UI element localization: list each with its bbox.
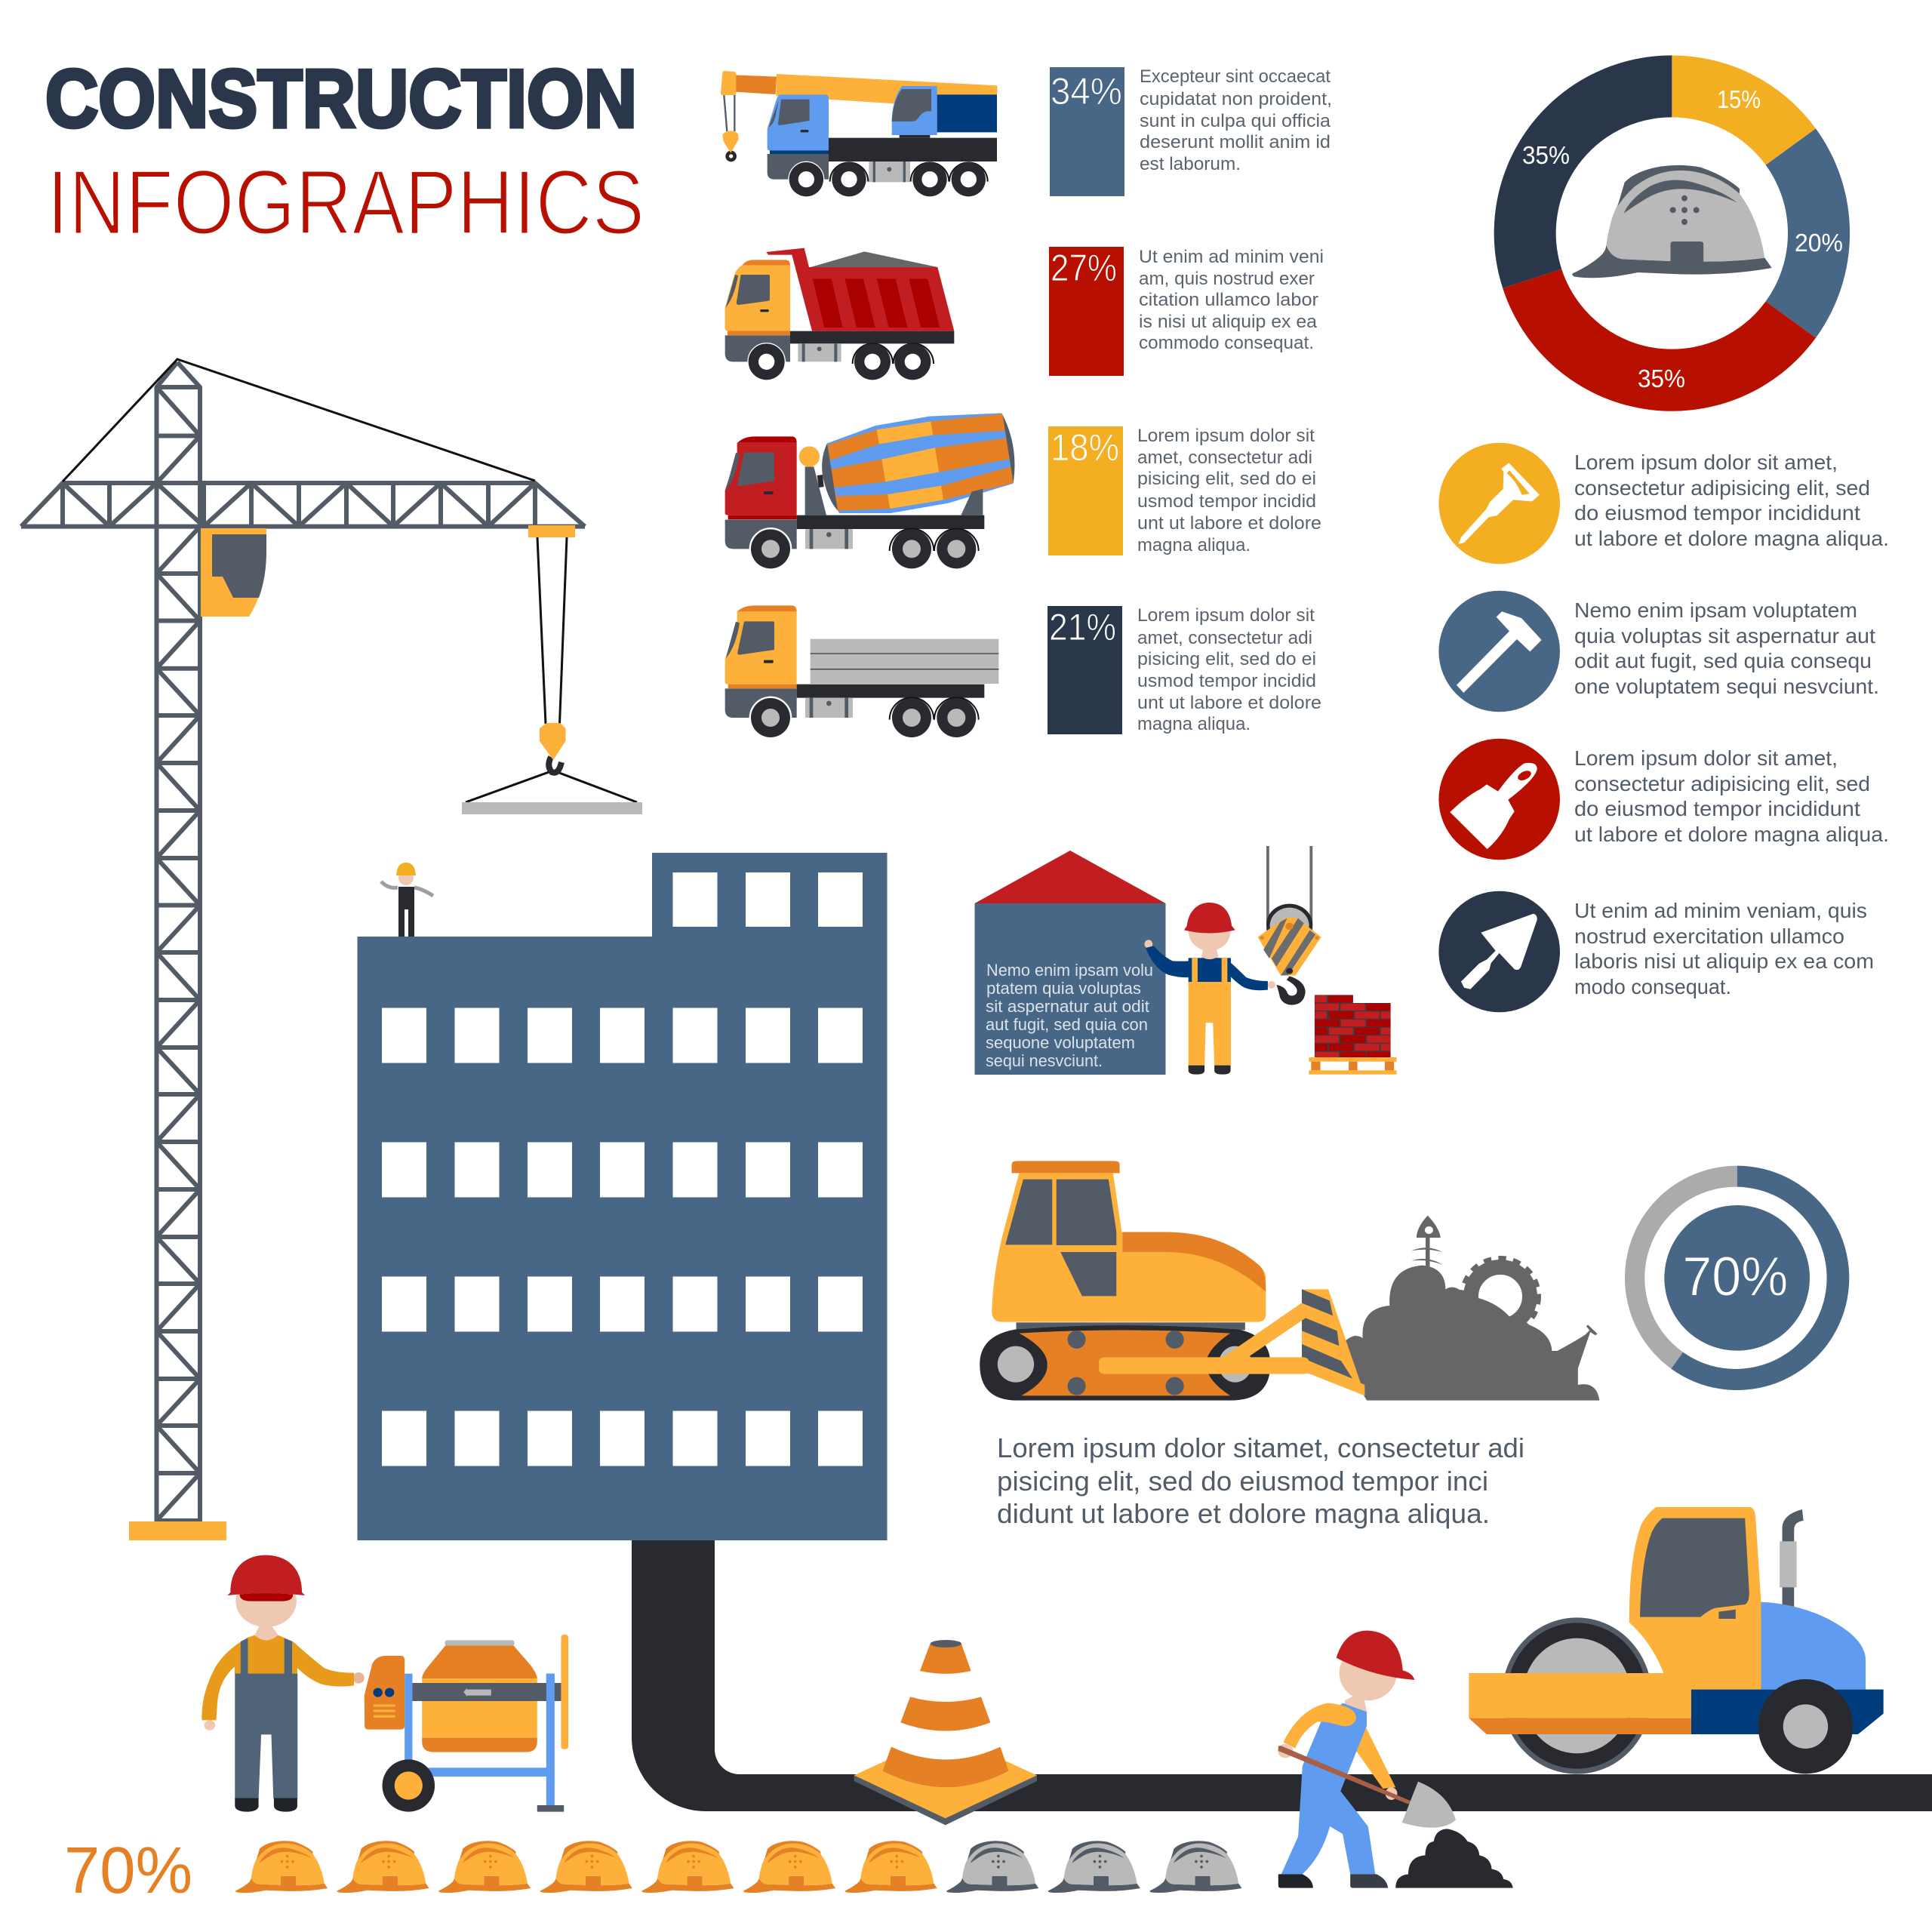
stat text: 27%: citation ullamco labor (1139, 290, 1318, 310)
ring chart 70%: 70% (1682, 1247, 1788, 1308)
cement mixer (365, 1635, 568, 1812)
bulldozer and debris (980, 1161, 1599, 1401)
bulldozer body (992, 1161, 1266, 1322)
stat text: 18% (1137, 426, 1321, 555)
exhaust pipe (1780, 1509, 1804, 1607)
house text: Nemo enim ipsam volu (986, 961, 1153, 980)
bulldozer caption (997, 1432, 1524, 1529)
house text panel (975, 851, 1165, 1075)
stat bar: 18% (1048, 426, 1123, 555)
suspended slab (462, 802, 642, 814)
stat text: 21%: unt ut labore et dolore (1137, 693, 1321, 713)
crane base (129, 1521, 226, 1540)
title line: infographics: INFOGRAPHICS (47, 151, 645, 254)
worker in yellow overalls (1145, 903, 1275, 1075)
icon: navy circle trowel (1438, 891, 1560, 1012)
helmet 7 (845, 1841, 937, 1893)
crane cabin (201, 528, 266, 617)
traffic cone (854, 1640, 1037, 1825)
crane trolley (528, 525, 575, 537)
text: hammer (1574, 598, 1879, 698)
stat text: 18%: usmod tempor incidid (1137, 491, 1316, 512)
title (45, 53, 645, 254)
dump truck (725, 248, 954, 380)
text: jackhammer: do eiusmod tempor incididunt (1574, 501, 1860, 525)
stat text: 21%: amet, consectetur adi (1137, 628, 1312, 648)
house text: aut fugit, sed quia con (986, 1015, 1148, 1034)
helmet 6 (743, 1841, 835, 1893)
stat text: 34%: est laborum. (1140, 154, 1241, 174)
bulldozer caption: Lorem ipsum dolor sitamet, consectetur adi (997, 1432, 1524, 1463)
helmet row (235, 1841, 1242, 1893)
donut chart with helmet (1494, 55, 1850, 411)
text: hammer: odit aut fugit, sed quia consequ (1574, 649, 1872, 672)
text: trowel: modo consequat. (1574, 975, 1731, 998)
icon: blue circle hammer (1438, 591, 1560, 712)
text: trowel: laboris nisi ut aliquip ex ea com (1574, 949, 1874, 973)
stat text: 18%: pisicing elit, sed do ei (1137, 469, 1316, 489)
helmet 3 (438, 1841, 531, 1893)
title line: construction: CONSTRUCTION (45, 53, 637, 145)
stat bar: 21% (1048, 606, 1122, 734)
helmet 10 (1149, 1841, 1242, 1893)
text: jackhammer: ut labore et dolore magna aliqua. (1574, 527, 1889, 550)
crane lattice (21, 362, 585, 1521)
text: jackhammer: consectetur adipisicing elit, sed (1574, 476, 1870, 500)
cement mixer truck (725, 413, 1014, 568)
text: scraper: consectetur adipisicing elit, sed (1574, 772, 1870, 795)
house text (986, 961, 1153, 1070)
donut labels: 15% (1717, 85, 1761, 113)
house text: sequi nesvciunt. (986, 1051, 1103, 1070)
helmet 4 (540, 1841, 632, 1893)
roller hood (1761, 1602, 1866, 1690)
text: jackhammer: Lorem ipsum dolor sit amet, (1574, 451, 1838, 474)
bulldozer caption: didunt ut labore et dolore magna aliqua. (997, 1498, 1490, 1529)
text: hammer: quia voluptas sit aspernatur aut (1574, 624, 1875, 648)
helmet stat 70%: 70% (64, 1834, 192, 1907)
house text: sit aspernatur aut odit (986, 997, 1149, 1016)
building windows (382, 872, 863, 1466)
crane hook (540, 723, 566, 773)
stat text: 27%: is nisi ut aliquip ex ea (1139, 312, 1318, 332)
stat text: 18%: magna aliqua. (1137, 535, 1251, 555)
stat bar: 18%: 18% (1051, 426, 1119, 469)
stat text: 18%: Lorem ipsum dolor sit (1137, 426, 1315, 446)
stat bar: 21%: 21% (1049, 606, 1116, 648)
text: hammer: Nemo enim ipsam voluptatem (1574, 598, 1857, 622)
worker in grey overalls (202, 1555, 365, 1812)
bulldozer blade (1300, 1289, 1364, 1395)
stat text: 27%: commodo consequat. (1139, 333, 1314, 353)
stat text: 34% (1140, 66, 1332, 174)
roller chassis (1691, 1690, 1884, 1734)
helmet 2 (337, 1841, 429, 1893)
house text: ptatem quia voluptas (986, 979, 1141, 998)
donut labels (1522, 85, 1843, 392)
icon: grey helmet (1572, 165, 1772, 278)
icon: yellow circle jackhammer (1438, 443, 1560, 564)
text: trowel (1574, 899, 1874, 998)
roller front wheel (1758, 1679, 1853, 1774)
stat text: 18%: amet, consectetur adi (1137, 448, 1312, 468)
stat text: 21%: Lorem ipsum dolor sit (1137, 605, 1315, 626)
donut segments (1494, 55, 1850, 411)
helmet 9 (1048, 1841, 1140, 1893)
tower crane (21, 359, 642, 1540)
text: scraper: Lorem ipsum dolor sit amet, (1574, 746, 1838, 770)
gear silhouette (1463, 1260, 1537, 1334)
crane cables (63, 359, 637, 802)
house text: sequone voluptatem (986, 1033, 1135, 1052)
text: trowel: nostrud exercitation ullamco (1574, 924, 1844, 948)
digging worker (1278, 1631, 1456, 1888)
road roller (1469, 1507, 1884, 1774)
bulldozer tracks (980, 1322, 1270, 1401)
ring chart 70% (1625, 1166, 1849, 1390)
text: trowel: Ut enim ad minim veniam, quis (1574, 899, 1867, 922)
stat text: 21%: pisicing elit, sed do ei (1137, 649, 1316, 669)
flatbed truck (725, 605, 998, 737)
mobile crane truck (721, 71, 997, 196)
worker with hook and bricks (1145, 846, 1397, 1075)
donut labels: 20% (1795, 229, 1843, 257)
stat text: 34%: cupidatat non proident, (1140, 89, 1332, 109)
donut labels: 35% (1522, 141, 1570, 169)
stat text: 27% (1139, 247, 1324, 353)
crane hook block (1258, 846, 1321, 1005)
bulldozer push arm (1099, 1303, 1311, 1374)
stat bar: 27% (1049, 247, 1124, 376)
stat text: 21% (1137, 605, 1321, 734)
helmet 8 (946, 1841, 1038, 1893)
roller drum (1502, 1610, 1677, 1774)
stat text: 27%: am, quis nostrud exer (1139, 269, 1315, 289)
donut labels: 35% (1638, 365, 1685, 392)
small worker on roof (381, 863, 433, 937)
stat text: 21%: magna aliqua. (1137, 714, 1251, 734)
text: scraper: ut labore et dolore magna aliqua. (1574, 823, 1889, 846)
house roof (975, 851, 1165, 903)
stat bar: 27%: 27% (1051, 247, 1117, 289)
text: jackhammer (1574, 451, 1889, 550)
dirt pile (1395, 1829, 1513, 1888)
house body (975, 903, 1165, 1075)
stat bar: 34%: 34% (1051, 70, 1122, 112)
roller cab (1469, 1507, 1761, 1718)
stat bar: 34% (1050, 67, 1124, 196)
fish bone (1411, 1216, 1443, 1266)
stat text: 34%: sunt in culpa qui officia (1140, 111, 1331, 131)
helmet 5 (641, 1841, 734, 1893)
icon: red circle scraper (1438, 739, 1560, 860)
stat text: 34%: Excepteur sint occaecat (1140, 66, 1331, 87)
brick stack on pallet (1309, 995, 1397, 1075)
bulldozer caption: pisicing elit, sed do eiusmod tempor inci (997, 1466, 1488, 1497)
debris pile (1340, 1266, 1599, 1401)
stat text: 21%: usmod tempor incidid (1137, 671, 1316, 691)
text: scraper (1574, 746, 1889, 846)
text: scraper: do eiusmod tempor incididunt (1574, 797, 1860, 820)
building (358, 853, 888, 1540)
worker with cement mixer (202, 1555, 568, 1812)
stat text: 27%: Ut enim ad minim veni (1139, 247, 1324, 267)
stat text: 18%: unt ut labore et dolore (1137, 513, 1321, 534)
helmet 1 (235, 1841, 328, 1893)
text: hammer: one voluptatem sequi nesvciunt. (1574, 675, 1879, 698)
stat text: 34%: deserunt mollit anim id (1140, 132, 1331, 152)
road (632, 1540, 1932, 1811)
